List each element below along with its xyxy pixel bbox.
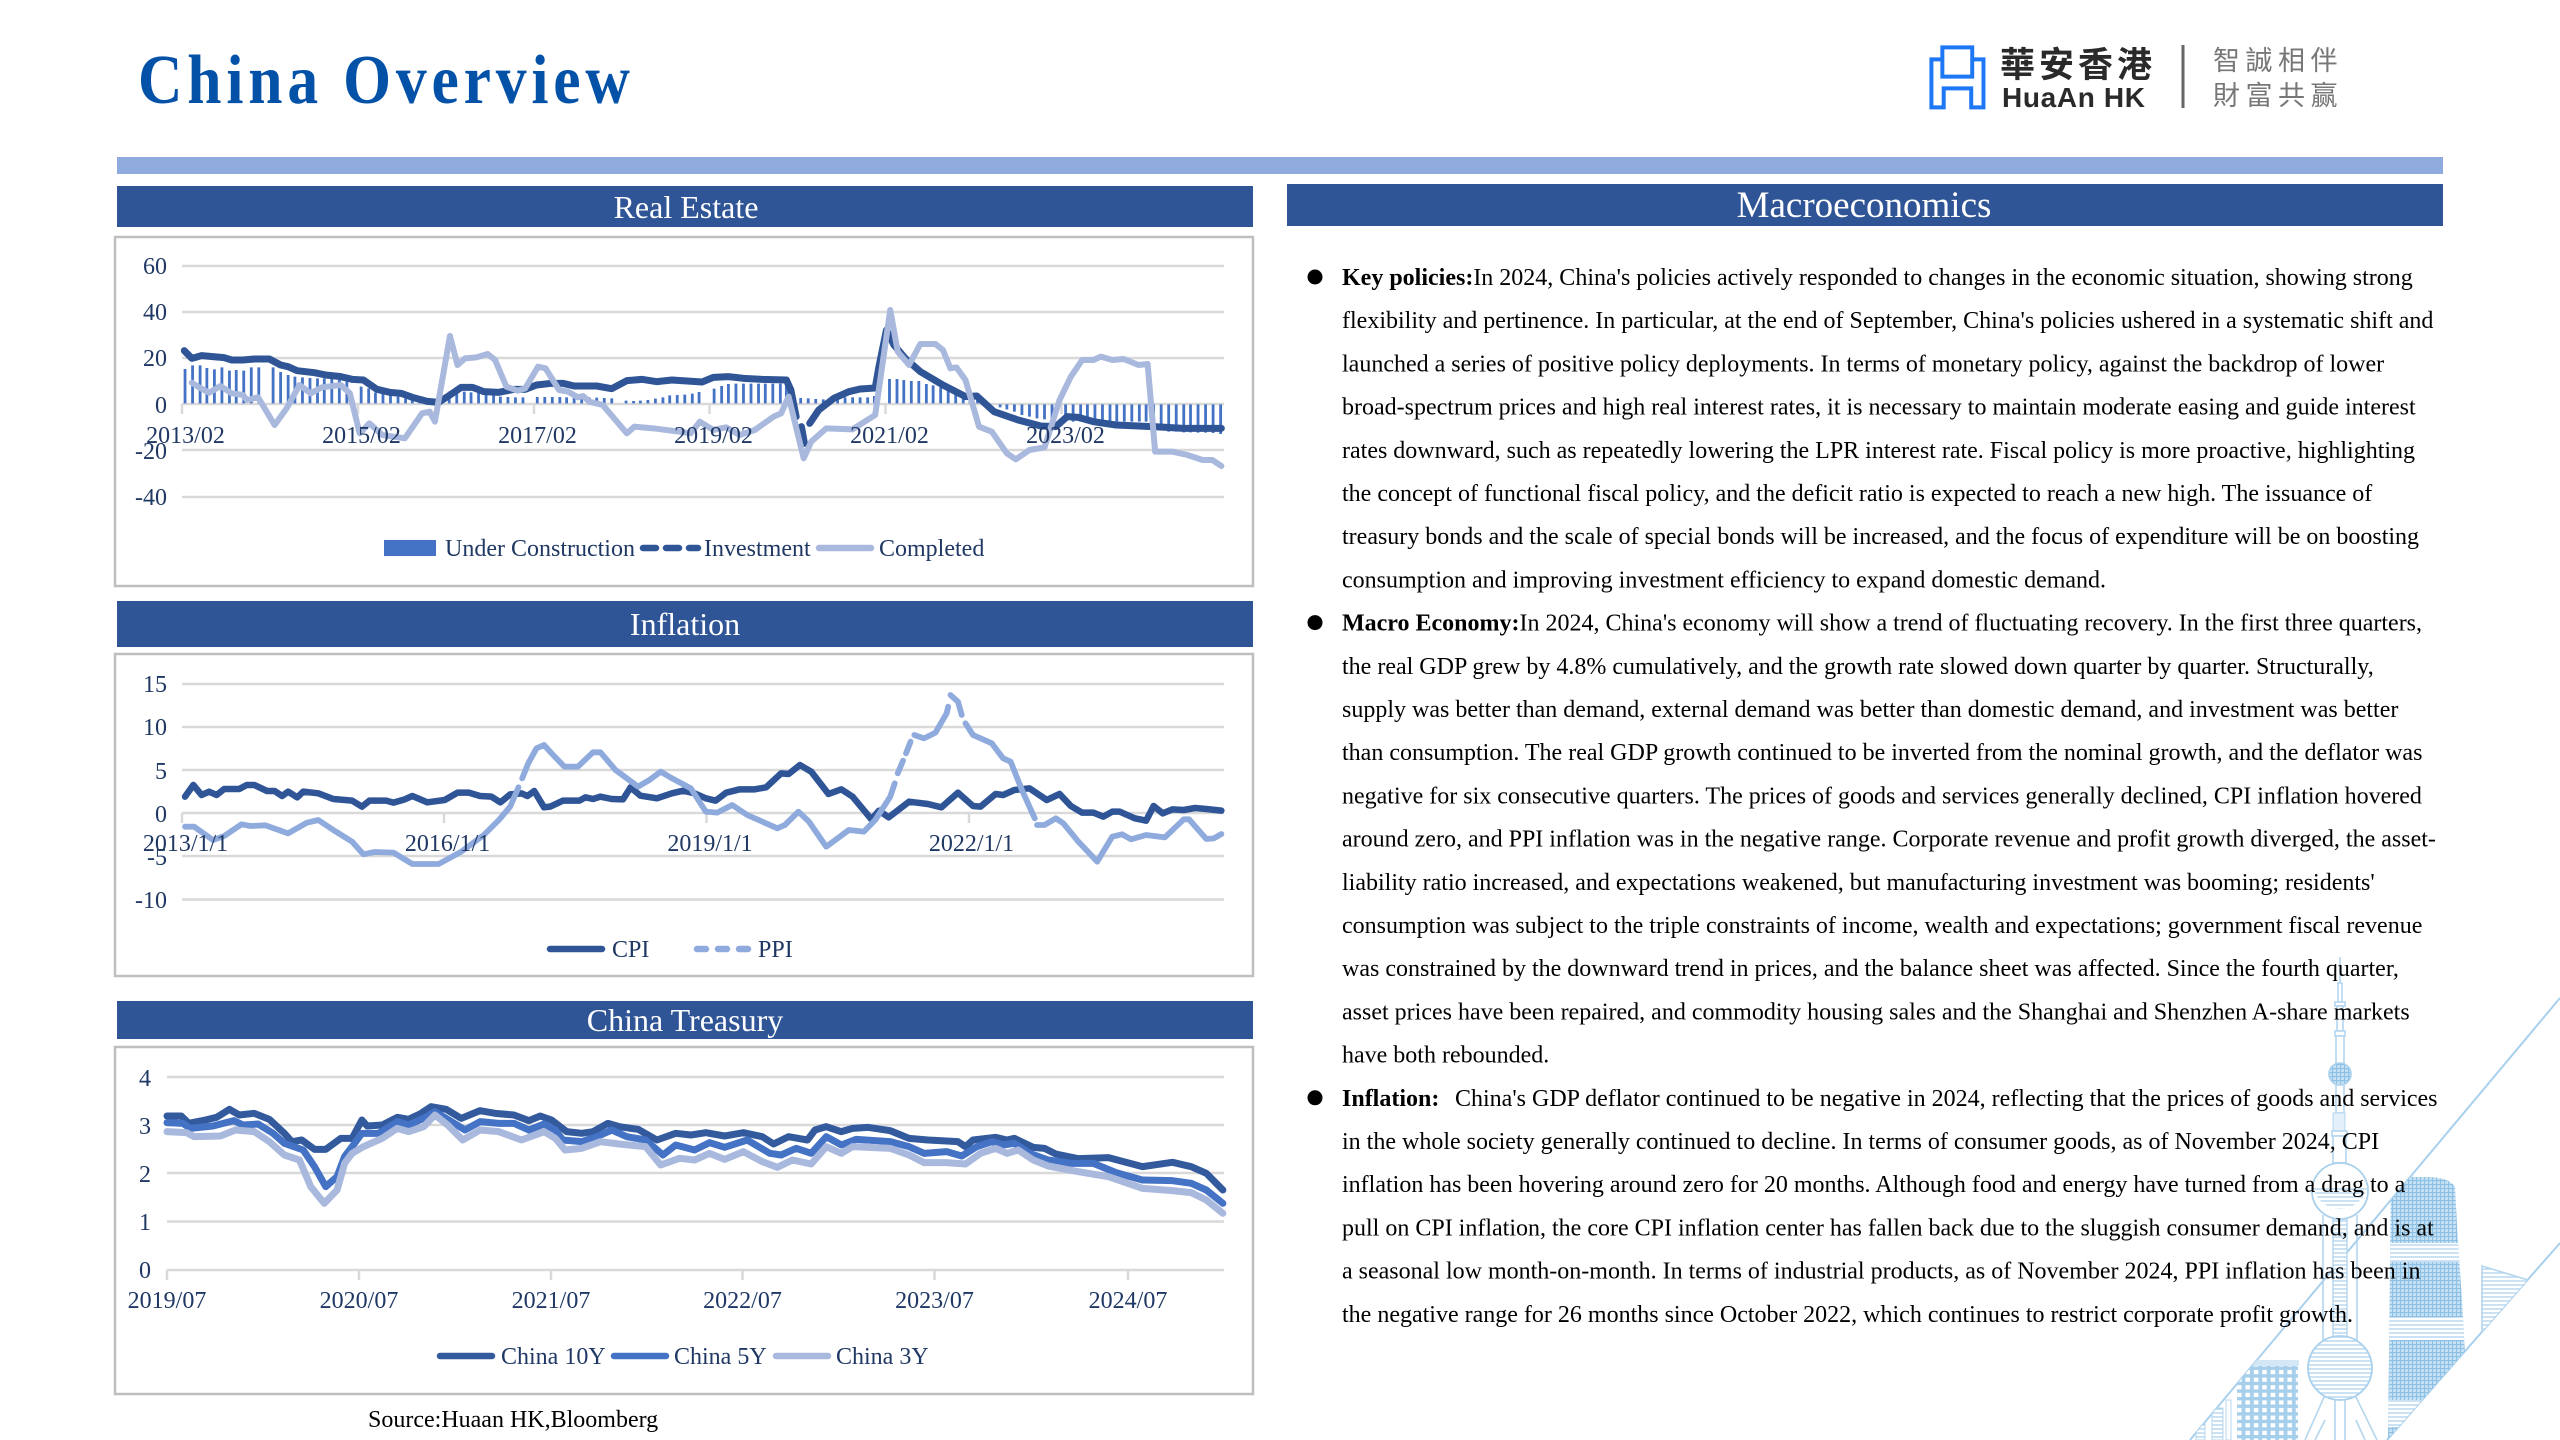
text block: key policies: Key policies:In 2024, China's policies actively responded to changes in the economic situation, showing strong xyxy=(1342,265,2413,291)
text block: key policies: rates downward, such as repeatedly lowering the LPR interest rate. Fiscal policy is more proactive, highlighting xyxy=(1342,438,2415,464)
text block: inflation: in the whole society generally continued to decline. In terms of consumer goods, as of November 2024, CPI xyxy=(1342,1129,2379,1155)
y axis labels: 0 xyxy=(155,802,167,828)
y axis labels: 3 xyxy=(139,1114,151,1140)
y axis labels xyxy=(135,672,167,914)
chart: PPI line xyxy=(185,695,1221,864)
y axis labels: 4 xyxy=(139,1066,151,1092)
x axis labels: 2015/02 xyxy=(322,423,401,449)
x axis labels xyxy=(146,423,1105,449)
y axis labels xyxy=(135,254,167,511)
heading: china treasury xyxy=(117,1001,1253,1039)
bullet xyxy=(1308,270,1322,284)
y axis labels: -40 xyxy=(135,485,167,511)
x axis labels: 2016/1/1 xyxy=(405,831,490,857)
text block: inflation: pull on CPI inflation, the core CPI inflation center has fallen back due to the sluggish consumer demand, and is at xyxy=(1342,1215,2434,1241)
legend: Under Construction xyxy=(445,536,635,562)
heading: real estate xyxy=(117,186,1253,227)
text block: key policies: consumption and improving investment efficiency to expand domestic demand. xyxy=(1342,567,2106,593)
text block: macro economy: asset prices have been repaired, and commodity housing sales and the Shanghai and Shenzhen A-share markets xyxy=(1342,999,2410,1025)
y axis labels: 15 xyxy=(143,672,167,698)
x axis labels: 2019/1/1 xyxy=(667,831,753,857)
x axis labels: 2019/02 xyxy=(674,423,753,449)
y axis labels xyxy=(139,1066,151,1284)
bullet xyxy=(1308,1090,1322,1105)
x axis labels xyxy=(128,1288,1167,1314)
legend: Investment xyxy=(704,536,811,562)
x axis labels: 2021/07 xyxy=(512,1288,590,1314)
text block: inflation: inflation has been hovering around zero for 20 months. Although food and energy have turned from a drag to a xyxy=(1342,1172,2406,1198)
legend: China 3Y xyxy=(836,1344,929,1370)
chart: completed line xyxy=(192,310,1221,466)
x axis labels: 2024/07 xyxy=(1089,1288,1167,1314)
x axis labels: 2017/02 xyxy=(498,423,577,449)
y axis labels: -20 xyxy=(135,439,167,465)
text block: inflation: Inflation: xyxy=(1342,1086,1439,1112)
logo english name: HuaAn HK xyxy=(2002,82,2145,113)
y axis labels: 40 xyxy=(143,300,167,326)
x axis labels: 2023/07 xyxy=(895,1288,974,1314)
x axis labels: 2021/02 xyxy=(850,423,929,449)
bullet xyxy=(1308,615,1322,630)
y axis labels: -10 xyxy=(135,888,167,914)
x axis labels: 2020/07 xyxy=(320,1288,398,1314)
text block: macro economy: have both rebounded. xyxy=(1342,1043,1549,1069)
legend: China 10Y xyxy=(501,1344,606,1370)
y axis labels: 1 xyxy=(139,1210,151,1236)
text block: macro economy: liability ratio increased, and expectations weakened, but manufacturing investment was booming; residents' xyxy=(1342,870,2375,896)
panel: china treasury xyxy=(115,1001,1253,1394)
x axis labels: 2013/02 xyxy=(146,423,225,449)
chart: investment line xyxy=(184,330,1221,443)
y axis labels: 60 xyxy=(143,254,167,280)
title: China Overview xyxy=(138,41,630,119)
legend xyxy=(384,536,984,562)
y axis labels: 0 xyxy=(139,1258,151,1284)
chart: under construction bars xyxy=(185,365,1221,434)
text block: macro economy: was constrained by the downward trend in prices, and the balance sheet was affected. Since the fourth quarter, xyxy=(1342,956,2399,982)
logo: HuaAn HK xyxy=(1931,37,2343,113)
x axis labels: 2022/1/1 xyxy=(929,831,1014,857)
legend: Completed xyxy=(879,536,984,562)
heading: inflation: Inflation xyxy=(630,606,740,642)
text block: inflation: the negative range for 26 months since October 2022, which continues to restrict corporate profit growth. xyxy=(1342,1302,2353,1328)
decorative skyline: Shanghai xyxy=(2190,957,2560,1440)
x axis labels: 2022/07 xyxy=(703,1288,782,1314)
legend xyxy=(550,937,793,963)
legend: CPI xyxy=(612,937,649,963)
heading: real estate: Real Estate xyxy=(614,189,758,225)
y axis labels: 2 xyxy=(139,1162,151,1188)
heading: macroeconomics: Macroeconomics xyxy=(1737,185,1991,226)
source note: Source:Huaan HK,Bloomberg xyxy=(368,1407,658,1433)
top divider bar xyxy=(117,157,2443,174)
text block: macro economy: negative for six consecutive quarters. The prices of goods and services generally declined, CPI inflation hovered xyxy=(1342,783,2422,809)
legend xyxy=(440,1344,929,1370)
text block: macro economy: supply was better than demand, external demand was better than domestic demand, and investment was better xyxy=(1342,697,2398,723)
y axis labels: 10 xyxy=(143,715,167,741)
chart: China 5Y line xyxy=(167,1112,1223,1203)
panel: macroeconomics xyxy=(1287,184,2443,1328)
chart: China 3Y line xyxy=(167,1115,1223,1213)
y axis labels: -5 xyxy=(147,845,167,871)
heading: macroeconomics xyxy=(1287,184,2443,226)
text block: key policies xyxy=(1308,265,2433,593)
y axis labels: 5 xyxy=(155,759,167,785)
x axis labels: 2023/02 xyxy=(1026,423,1105,449)
y axis labels: 20 xyxy=(143,346,167,372)
panel: inflation xyxy=(115,601,1253,976)
text block: macro economy: Macro Economy:In 2024, China's economy will show a trend of fluctuating recovery. In the first three quarters, xyxy=(1342,611,2422,637)
icon: HuaAn logo mark xyxy=(1931,47,1983,107)
logo chinese name: 華安香港 xyxy=(2000,37,2156,88)
heading: china treasury: China Treasury xyxy=(587,1002,783,1038)
text block: macro economy: around zero, and PPI inflation was in the negative range. Corporate revenue and profit growth diverged, the asset- xyxy=(1342,827,2436,853)
x axis labels: 2019/07 xyxy=(128,1288,206,1314)
text block: inflation: China's GDP deflator continued to be negative in 2024, reflecting that the prices of goods and services xyxy=(1455,1086,2438,1112)
text block: key policies: the concept of functional fiscal policy, and the deficit ratio is expected to reach a new high. The issuance of xyxy=(1342,481,2372,507)
text block: inflation: a seasonal low month-on-month. In terms of industrial products, as of November 2024, PPI inflation has been in xyxy=(1342,1259,2420,1285)
logo slogan line 1: 智誠相伴 xyxy=(2213,39,2343,78)
legend: PPI xyxy=(758,937,793,963)
chart: CPI line xyxy=(185,765,1221,821)
chart: China 10Y line xyxy=(167,1107,1223,1190)
x axis labels xyxy=(143,831,1014,857)
heading: inflation xyxy=(117,601,1253,647)
text block: key policies: treasury bonds and the scale of special bonds will be increased, and the focus of expenditure will be on boosting xyxy=(1342,524,2419,550)
text block: key policies: broad-spectrum prices and high real interest rates, it is necessary to maintain moderate easing and guide interest xyxy=(1342,395,2416,421)
text block: macro economy xyxy=(1308,611,2436,1069)
text block: key policies: flexibility and pertinence. In particular, at the end of September, China's policies ushered in a systematic shift and xyxy=(1342,308,2433,334)
legend: China 5Y xyxy=(674,1344,767,1370)
text block: macro economy: than consumption. The real GDP growth continued to be inverted from the nominal growth, and the deflator was xyxy=(1342,740,2422,766)
text block: inflation xyxy=(1308,1086,2438,1328)
text block: key policies: launched a series of positive policy deployments. In terms of monetary policy, against the backdrop of lower xyxy=(1342,351,2384,377)
text block: macro economy: consumption was subject to the triple constraints of income, wealth and expectations; government fiscal revenue xyxy=(1342,913,2422,939)
panel: real estate xyxy=(115,186,1253,586)
x axis labels: 2013/1/1 xyxy=(143,831,228,857)
text block: macro economy: the real GDP grew by 4.8% cumulatively, and the growth rate slowed down quarter by quarter. Structurally, xyxy=(1342,654,2374,680)
logo slogan line 2: 財富共赢 xyxy=(2213,74,2343,113)
y axis labels: 0 xyxy=(155,393,167,419)
